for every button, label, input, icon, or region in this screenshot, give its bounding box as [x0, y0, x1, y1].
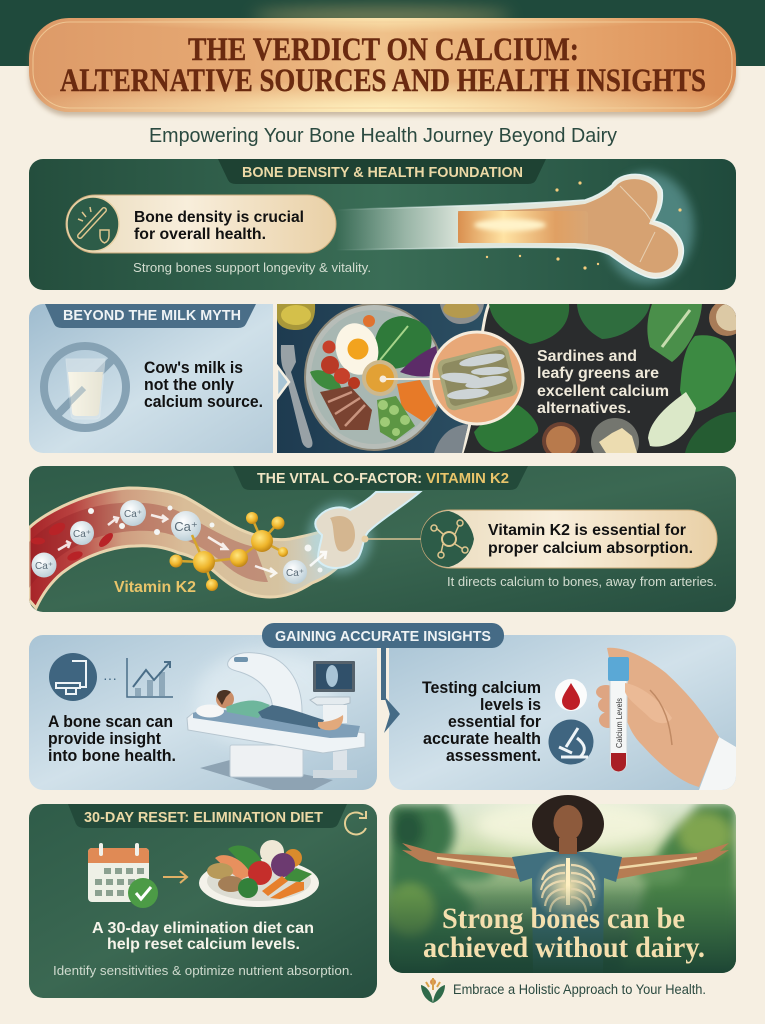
text: milk statement — [144, 358, 263, 411]
callout: vitamin K2 — [421, 510, 717, 568]
floor base — [200, 760, 333, 790]
oil glass — [277, 304, 315, 330]
callout text: Vitamin K2 is essential for — [488, 522, 686, 539]
text: milk statement: not the only — [144, 375, 235, 394]
ribs — [534, 852, 602, 924]
icon: molecule — [421, 511, 474, 567]
small particles — [88, 506, 322, 572]
heading tab: vitamin K2: VITAMIN K2 — [426, 471, 509, 487]
text: testing calcium — [422, 678, 541, 765]
almond bowl — [542, 422, 580, 453]
text: testing calcium: assessment. — [446, 746, 541, 765]
heading tab: bone density — [218, 159, 546, 184]
text: bone scan: A bone scan can — [48, 712, 173, 731]
wheat bowl top right — [709, 304, 736, 336]
callout: bone density — [66, 195, 336, 253]
grain bowl — [440, 304, 484, 324]
supporting text: Strong bones support longevity & vitality. — [133, 260, 371, 275]
icon: holistic hands — [421, 978, 445, 1003]
bone in vessel — [315, 492, 420, 568]
divider curve — [462, 304, 489, 453]
footer — [421, 978, 706, 1003]
text: bone scan — [48, 712, 176, 765]
panel: vitamin K2 — [29, 466, 736, 612]
panel: strong bones photo — [386, 795, 736, 973]
text: milk statement: Cow's milk is — [144, 358, 243, 377]
tomatoes — [322, 340, 336, 354]
red cells — [31, 523, 113, 560]
pedestal — [230, 745, 303, 777]
heading tab: vitamin K2: THE VITAL CO-FACTOR: — [257, 471, 422, 487]
text: bone scan: provide insight — [48, 729, 161, 748]
text: sardines: excellent calcium — [537, 383, 669, 400]
grey fish — [434, 424, 468, 453]
console — [310, 697, 350, 705]
quote text — [423, 902, 705, 964]
calcium ions — [32, 500, 307, 584]
pillow — [196, 704, 224, 718]
calcium ions: Ca⁺ — [286, 568, 304, 579]
back of hand — [607, 648, 719, 787]
icon: chart — [127, 658, 173, 697]
subtitle: Empowering Your Bone Health Journey Beyond Dairy — [149, 125, 617, 147]
monitor — [313, 661, 355, 692]
egg — [336, 323, 378, 375]
greens — [374, 316, 432, 369]
calcium ions: Ca⁺ — [35, 561, 53, 572]
arrow — [163, 871, 187, 883]
illustration: food plate — [199, 840, 319, 907]
illustration: blood vessel — [29, 488, 420, 608]
text: sardines — [537, 348, 669, 417]
title text: THE VERDICT ON CALCIUM: — [188, 32, 579, 68]
flow arrows — [58, 515, 326, 577]
kale bottom right — [685, 412, 736, 453]
icon: cycle arrow — [345, 811, 366, 834]
illustration: hand with test tube: Calcium Levels — [615, 698, 624, 748]
heading tab: bone density: BONE DENSITY & HEALTH FOUNDATION — [242, 165, 523, 181]
connector line — [368, 538, 421, 540]
calcium ions: Ca⁺ — [124, 509, 142, 520]
purple cabbage — [400, 346, 437, 376]
panel: 30-day reset — [29, 804, 377, 998]
icon: microscope — [548, 720, 594, 764]
icon: scanner — [49, 653, 97, 701]
icon: no milk — [44, 346, 126, 428]
calcium ions: Ca⁺ — [174, 519, 198, 534]
illustration: scanner machine — [187, 650, 365, 790]
figure body — [402, 843, 729, 973]
heading pill: accurate insights: GAINING ACCURATE INSIGHTS — [275, 628, 491, 645]
leafy greens — [474, 304, 736, 453]
panel: bone density — [29, 159, 736, 290]
can callout — [380, 332, 523, 424]
tofu bowl — [591, 418, 639, 453]
panel: beyond the milk myth — [29, 304, 273, 453]
text: testing calcium: accurate health — [423, 729, 541, 748]
bottom fade — [389, 885, 736, 973]
table — [187, 713, 365, 753]
photo background — [386, 799, 736, 973]
heading pill: accurate insights — [262, 623, 504, 648]
vitamin K2 molecule — [170, 512, 288, 591]
patient — [216, 690, 234, 708]
label: vitamin K2: Vitamin K2 — [114, 579, 196, 596]
icon: calendar — [88, 843, 158, 908]
basil — [474, 405, 538, 452]
dinner plate — [305, 304, 443, 450]
illustration: glowing femur — [336, 172, 694, 284]
shirt — [512, 852, 622, 973]
test tube — [610, 660, 627, 772]
sleeve — [699, 737, 736, 790]
tagline: Embrace a Holistic Approach to Your Health. — [453, 982, 706, 997]
heading tab: vitamin K2 — [233, 466, 528, 490]
sauce bowl — [362, 360, 398, 396]
divider with chevron — [381, 648, 400, 733]
callout text: for overall health. — [134, 226, 266, 243]
steak — [320, 386, 372, 430]
text: testing calcium: Testing calcium — [422, 678, 541, 697]
fingers behind tube — [596, 685, 616, 699]
text: sardines: Sardines and — [537, 348, 637, 365]
heading tab: milk myth: BEYOND THE MILK MYTH — [63, 307, 241, 324]
quote text: achieved without dairy. — [423, 931, 705, 964]
top band — [0, 0, 765, 66]
carrots — [397, 380, 437, 422]
title banner — [29, 8, 736, 116]
text: elimination diet: A 30-day elimination diet can — [92, 920, 314, 937]
calcium ions: Ca⁺ — [73, 529, 91, 540]
notch arrow — [277, 366, 289, 398]
panel: blood test — [389, 635, 736, 790]
arch — [228, 653, 302, 715]
illustration: hand with test tube — [596, 648, 736, 790]
supporting text: Identify sensitivities & optimize nutrient absorption. — [53, 963, 353, 978]
text: milk statement: calcium source. — [144, 392, 263, 411]
panel: food image — [277, 304, 736, 453]
thumb — [625, 683, 672, 723]
icon: blood drop — [555, 679, 587, 711]
text: sardines: leafy greens are — [537, 365, 659, 382]
text: testing calcium: essential for — [448, 712, 541, 731]
supporting text: It directs calcium to bones, away from arteries. — [447, 574, 717, 589]
callout text: proper calcium absorption. — [488, 540, 693, 557]
heading tab: milk myth — [45, 304, 256, 328]
title text — [60, 32, 706, 99]
callout text — [134, 209, 304, 243]
fork — [281, 345, 312, 448]
text: elimination diet: help reset calcium levels. — [107, 936, 300, 953]
figure head — [532, 795, 604, 854]
heading tab: 30-day reset: 30-DAY RESET: ELIMINATION DIET — [84, 810, 323, 826]
text: elimination diet — [92, 920, 314, 953]
glow around bone — [308, 502, 372, 574]
callout text — [488, 522, 693, 557]
callout text: Bone density is crucial — [134, 209, 304, 226]
quote text: Strong bones can be — [442, 902, 685, 935]
panel: bone scan — [29, 635, 377, 790]
trees — [386, 804, 736, 973]
cucumbers — [377, 396, 415, 441]
heading tab: 30-day reset — [68, 804, 347, 828]
text: testing calcium: levels is — [480, 695, 541, 714]
sunlight — [473, 799, 663, 851]
icon: bone and shield — [67, 197, 119, 251]
ellipsis: ··· — [103, 670, 117, 686]
bok choy — [680, 335, 736, 412]
text: bone scan: into bone health. — [48, 746, 176, 765]
arms — [402, 843, 520, 879]
text: sardines: alternatives. — [537, 400, 631, 417]
